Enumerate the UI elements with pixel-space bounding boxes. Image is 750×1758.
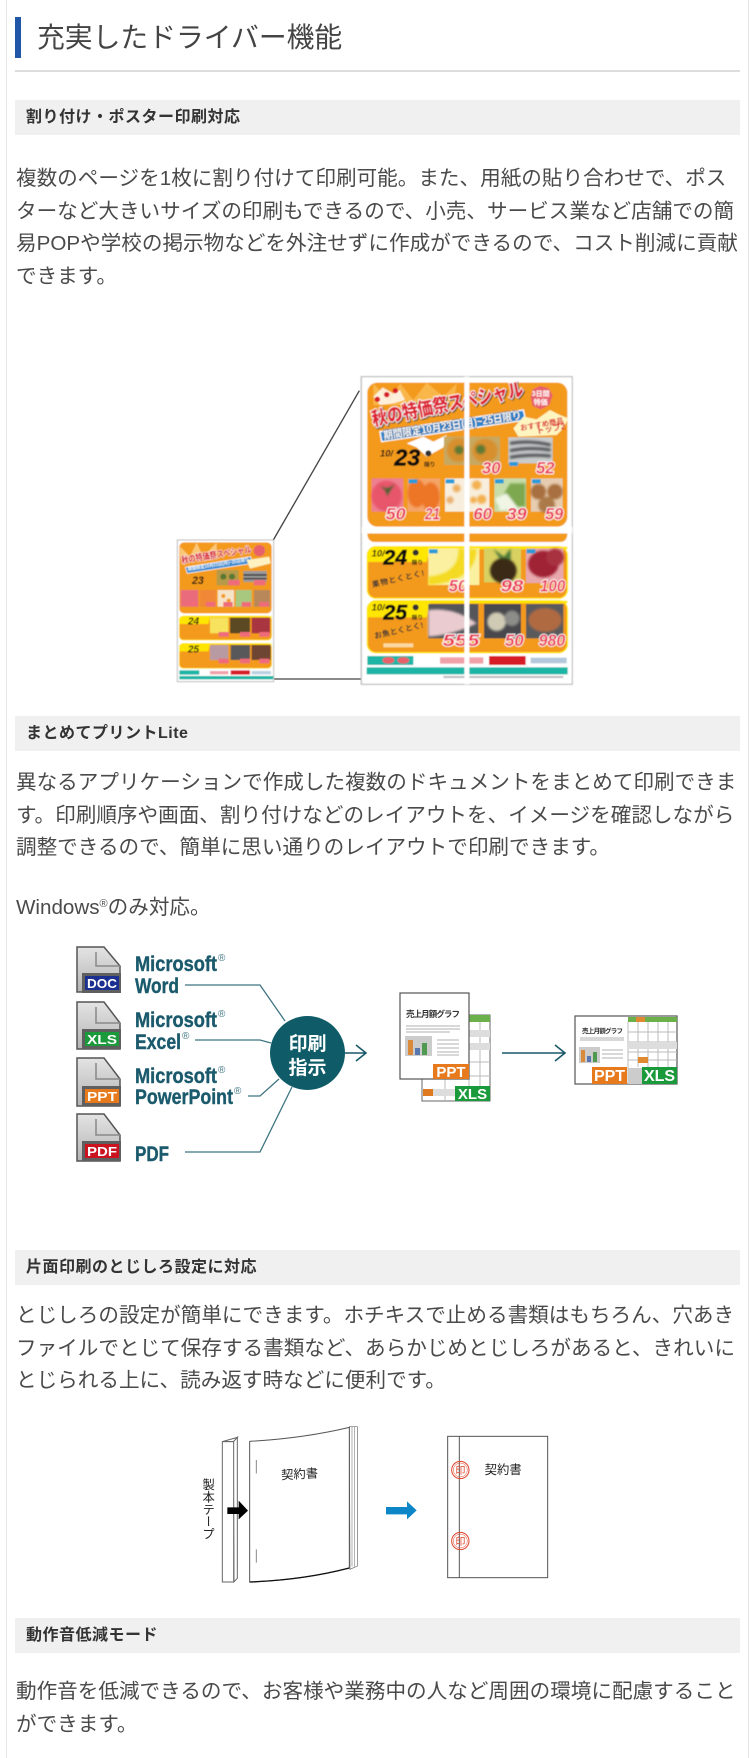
icon: DOC file: DOC	[87, 976, 118, 991]
small poster: 25	[187, 645, 200, 656]
small poster: 23	[191, 575, 204, 587]
subheading: print together Lite	[15, 716, 740, 751]
poster prices: 59	[545, 504, 564, 523]
paragraph: low noise mode	[16, 1680, 736, 1736]
separate documents: XLS	[458, 1086, 487, 1103]
application labels: ®	[218, 1065, 226, 1076]
paragraph: layout and poster printing	[16, 167, 738, 288]
bound contract	[448, 1436, 548, 1578]
poster enlargement illustration	[176, 376, 574, 686]
paragraph: binding margin	[16, 1304, 735, 1392]
print instruction circle	[270, 1016, 345, 1090]
icon: XLS file: XLS	[87, 1032, 117, 1047]
subheading: low noise mode	[15, 1618, 740, 1653]
poster prices: 50	[386, 504, 406, 523]
large tiled poster	[361, 377, 572, 684]
arrow: result	[386, 1501, 417, 1519]
poster prices: 555	[443, 631, 480, 650]
large tiled poster: 特価	[534, 398, 548, 407]
subheading: binding margin	[15, 1250, 740, 1285]
label: binding tape: 製本テープ	[201, 1478, 215, 1540]
application labels: PDF	[135, 1143, 169, 1166]
separate documents: PPT	[436, 1064, 466, 1081]
print instruction circle: 指示	[288, 1057, 327, 1079]
application labels: ®	[218, 1009, 226, 1020]
poster prices: 50	[505, 631, 524, 650]
poster prices: 98	[501, 577, 524, 596]
poster prices: 100	[540, 577, 566, 596]
subheading: binding margin: 片面印刷のとじしろ設定に対応	[26, 1259, 257, 1276]
paragraph: print together Lite: す。印刷順序や画面、割り付けなどのレイアウトを、イメージを確認しながら	[16, 804, 734, 827]
large tiled poster: 10/	[372, 549, 386, 559]
large tiled poster: トップ2	[535, 421, 567, 436]
bound contract: 契約書	[485, 1462, 522, 1477]
merged document: PPT	[594, 1068, 625, 1085]
poster prices: 39	[507, 504, 527, 523]
large tiled poster: 25	[382, 600, 408, 624]
application labels: ®	[234, 1086, 242, 1097]
connector lines	[185, 985, 292, 1152]
application labels: Excel	[135, 1031, 181, 1054]
photo details	[371, 438, 564, 637]
icon: PPT file: PPT	[87, 1089, 117, 1104]
arrow: to merged page	[502, 1045, 565, 1061]
large tiled poster: 限り	[412, 559, 423, 567]
subheading: low noise mode: 動作音低減モード	[26, 1627, 158, 1644]
paragraph: layout and poster printing: 複数のページを1枚に割り付けて印刷可能。また、用紙の貼り合わせで、ポス	[16, 167, 726, 190]
binding tape illustration	[201, 1426, 548, 1583]
paragraph: low noise mode: 動作音を低減できるので、お客様や業務中の人など周囲の環境に配慮すること	[16, 1680, 736, 1703]
separate documents	[400, 993, 490, 1103]
paragraph: low noise mode: ができます。	[16, 1713, 138, 1736]
title text: 充実したドライバー機能	[37, 22, 342, 53]
poster prices: 52	[536, 459, 555, 478]
subheading: layout and poster printing: 割り付け・ポスター印刷対応	[26, 109, 241, 126]
poster prices	[386, 459, 566, 650]
application labels: Microsoft	[135, 953, 217, 976]
poster prices: 50	[449, 577, 468, 596]
large tiled poster: 23	[393, 444, 420, 470]
title accent bar	[15, 17, 21, 58]
tile gap	[464, 377, 469, 684]
large tiled poster: お魚とくとく!	[373, 620, 424, 641]
booklet: 契約書	[281, 1465, 318, 1482]
print workflow diagram	[76, 946, 678, 1166]
poster date banner: 期間限定10月23日(月)~25日限り	[382, 408, 522, 442]
paragraph: print together Lite	[16, 771, 736, 859]
separate documents: 売上月額グラフ	[406, 1009, 460, 1019]
large tiled poster: 24	[382, 545, 407, 569]
small poster: 24	[187, 617, 200, 628]
connector lines from small poster to large poster	[273, 391, 361, 679]
application labels: Word	[135, 975, 179, 998]
application labels: ®	[218, 953, 226, 964]
paragraph: print together Lite: 異なるアプリケーションで作成した複数のドキュメントをまとめて印刷できま	[16, 771, 736, 794]
paragraph: layout and poster printing: 易POPや学校の掲示物などを外注せずに作成ができるので、コスト削減に貢献	[16, 232, 738, 255]
icon: DOC file	[77, 947, 121, 993]
merged document	[575, 1016, 677, 1085]
application labels: Microsoft	[135, 1009, 217, 1032]
icon: PPT file	[77, 1058, 121, 1106]
poster footer	[367, 656, 413, 665]
print instruction circle: 印刷	[288, 1033, 327, 1055]
large tiled poster: 限り	[412, 613, 423, 621]
poster headline: 秋の特価祭スペシャル	[370, 379, 525, 430]
small poster	[177, 540, 274, 682]
merged document: XLS	[644, 1068, 675, 1085]
poster prices: 21	[424, 504, 440, 523]
price tags	[409, 462, 541, 553]
application labels: PowerPoint	[135, 1086, 233, 1109]
arrow: to documents	[345, 1045, 366, 1061]
poster prices: 30	[482, 459, 501, 478]
title heading	[15, 17, 740, 72]
paragraph: layout and poster printing: ターなど大きいサイズの印刷もできるので、小売、サービス業など店舗での簡	[16, 200, 734, 223]
poster dates: 10/	[380, 449, 394, 459]
application labels: Microsoft	[135, 1065, 217, 1088]
stamps: 印	[455, 1536, 465, 1548]
icon: PDF file	[77, 1114, 121, 1161]
poster prices: 980	[539, 631, 566, 650]
subheading: print together Lite: まとめてプリントLite	[26, 725, 188, 742]
application labels: ®	[182, 1031, 190, 1042]
paragraph: binding margin: ファイルでとじて保存する書類など、あらかじめとじしろがあると、きれいに	[16, 1337, 735, 1360]
merged document: 売上月額グラフ	[582, 1026, 623, 1035]
poster product photos	[371, 437, 564, 638]
small poster: 秋の特価祭スペシャル	[181, 543, 252, 565]
stamps	[452, 1461, 469, 1550]
large tiled poster: 10/	[372, 603, 386, 613]
booklet	[250, 1427, 357, 1582]
stamps: 印	[455, 1465, 465, 1477]
binding tape strip	[222, 1437, 237, 1582]
paragraph: Windows only: Windows®のみ対応。	[16, 896, 211, 919]
application labels	[135, 953, 242, 1166]
large tiled poster: 果物とくとく!	[371, 568, 425, 589]
icon: PDF file: PDF	[87, 1144, 117, 1159]
paragraph: binding margin: とじられる上に、読み返す時などに便利です。	[16, 1369, 446, 1392]
subheading: layout and poster printing	[15, 100, 740, 135]
large tiled poster: 3日間	[532, 390, 550, 398]
large tiled poster: おすすめ商品	[519, 416, 564, 433]
small poster: 期間限定10月23日(月)~25日限り	[187, 556, 250, 573]
icon: XLS file	[77, 1002, 121, 1049]
paragraph: binding margin: とじしろの設定が簡単にできます。ホチキスで止める書類はもちろん、穴あき	[16, 1304, 734, 1327]
poster prices: 60	[473, 504, 493, 523]
arrow: tape onto booklet	[227, 1501, 248, 1519]
paragraph: layout and poster printing: できます。	[16, 265, 117, 288]
large tiled poster: 限り	[424, 461, 435, 469]
paragraph: print together Lite: 調整できるので、簡単に思い通りのレイアウトで印刷できます。	[16, 836, 610, 859]
